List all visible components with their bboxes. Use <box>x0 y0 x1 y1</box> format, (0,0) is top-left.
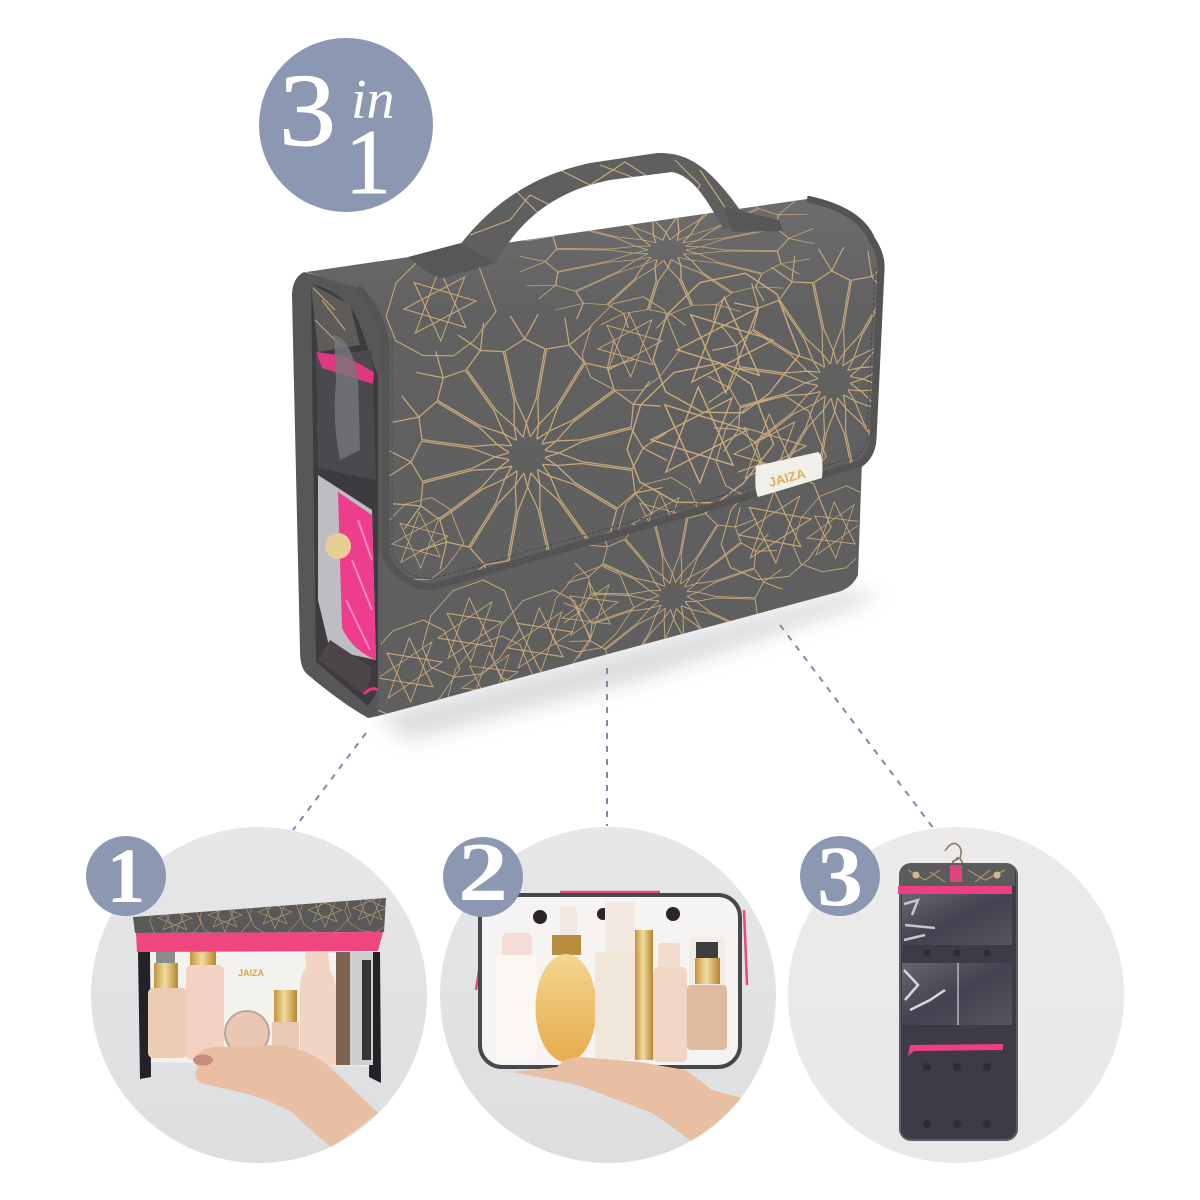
pouch 2 pink side trim <box>476 892 747 990</box>
pouch 2 clear body <box>480 895 740 1067</box>
organizer body <box>900 864 1017 1140</box>
handle right tab <box>724 207 783 232</box>
panel 2: large clear pouch <box>440 827 776 1163</box>
lower body panel <box>378 460 862 716</box>
organizer patterned top band <box>900 864 1015 886</box>
3 in 1 badge: 3 <box>279 53 336 168</box>
pouch 2 gold tube <box>635 930 653 1060</box>
pouch 1 dark item <box>336 952 373 1065</box>
number badge 3 <box>800 828 880 924</box>
dashed connector to panel 2 <box>606 668 608 826</box>
lower body gold geometric pattern <box>378 482 860 714</box>
number badge 2 <box>443 826 523 919</box>
number badge 2: 2 <box>458 826 508 919</box>
pouch 1 hand <box>193 1045 378 1147</box>
hanger hook <box>945 843 964 866</box>
travel bag main product <box>292 153 885 718</box>
pouch 2 clear pump bottle <box>595 902 639 1060</box>
organizer snap buttons <box>923 950 991 1128</box>
pouch 1 pink bottle <box>186 951 224 1060</box>
pouch 2 foundation bottle <box>687 937 727 1050</box>
pouch 2 white bottle <box>495 933 537 1060</box>
pouch 1 pink zipper <box>136 932 383 952</box>
pouch 1 black edges <box>138 952 381 1083</box>
carrying handle <box>408 153 783 278</box>
pouch 1 clear window <box>150 951 372 1066</box>
organizer middle clear pocket <box>902 963 1012 1025</box>
3 in 1 badge: in <box>351 69 395 131</box>
pouch 1 small foundation <box>272 990 299 1052</box>
pouch 2 oil bottle <box>536 907 596 1062</box>
organizer lower pink zipper <box>908 1044 1003 1056</box>
3 in 1 badge <box>259 38 433 213</box>
pouch 1 printed logo: JAIZA <box>238 968 265 978</box>
dashed connector to panel 3 <box>780 625 934 829</box>
flap stitching <box>392 268 875 579</box>
number badge 1: 1 <box>106 832 146 919</box>
number badge 1 <box>86 832 166 919</box>
handle left tab <box>408 243 496 278</box>
flap gold geometric pattern <box>377 159 963 603</box>
panel 3: hanging organizer <box>788 827 1124 1163</box>
gold zipper pull <box>325 533 351 559</box>
pouch 1 foundation bottle <box>148 951 187 1058</box>
logo tag <box>755 452 822 497</box>
pouch 1 tall bottle <box>300 952 336 1065</box>
pouch 2 hand <box>512 1057 742 1142</box>
pouch 1 cream jar <box>225 1011 269 1055</box>
front flap <box>306 199 881 587</box>
pouch 2 snap holes <box>533 907 680 924</box>
3 in 1 badge: 1 <box>345 111 391 213</box>
number badge 3: 3 <box>817 828 863 924</box>
panel 1: small clear pouch <box>91 827 427 1163</box>
flap binding edge <box>357 199 881 587</box>
logo tag: JAIZA <box>767 466 808 490</box>
organizer top pink zipper <box>898 886 1012 894</box>
dashed connector to panel 1 <box>293 733 366 830</box>
pouch 1 patterned top band <box>133 898 386 933</box>
bag drop shadow <box>375 590 880 740</box>
organizer upper clear pocket <box>902 894 1012 945</box>
pouch 2 beige bottle <box>653 943 687 1062</box>
side opening with clear pockets <box>292 272 386 718</box>
